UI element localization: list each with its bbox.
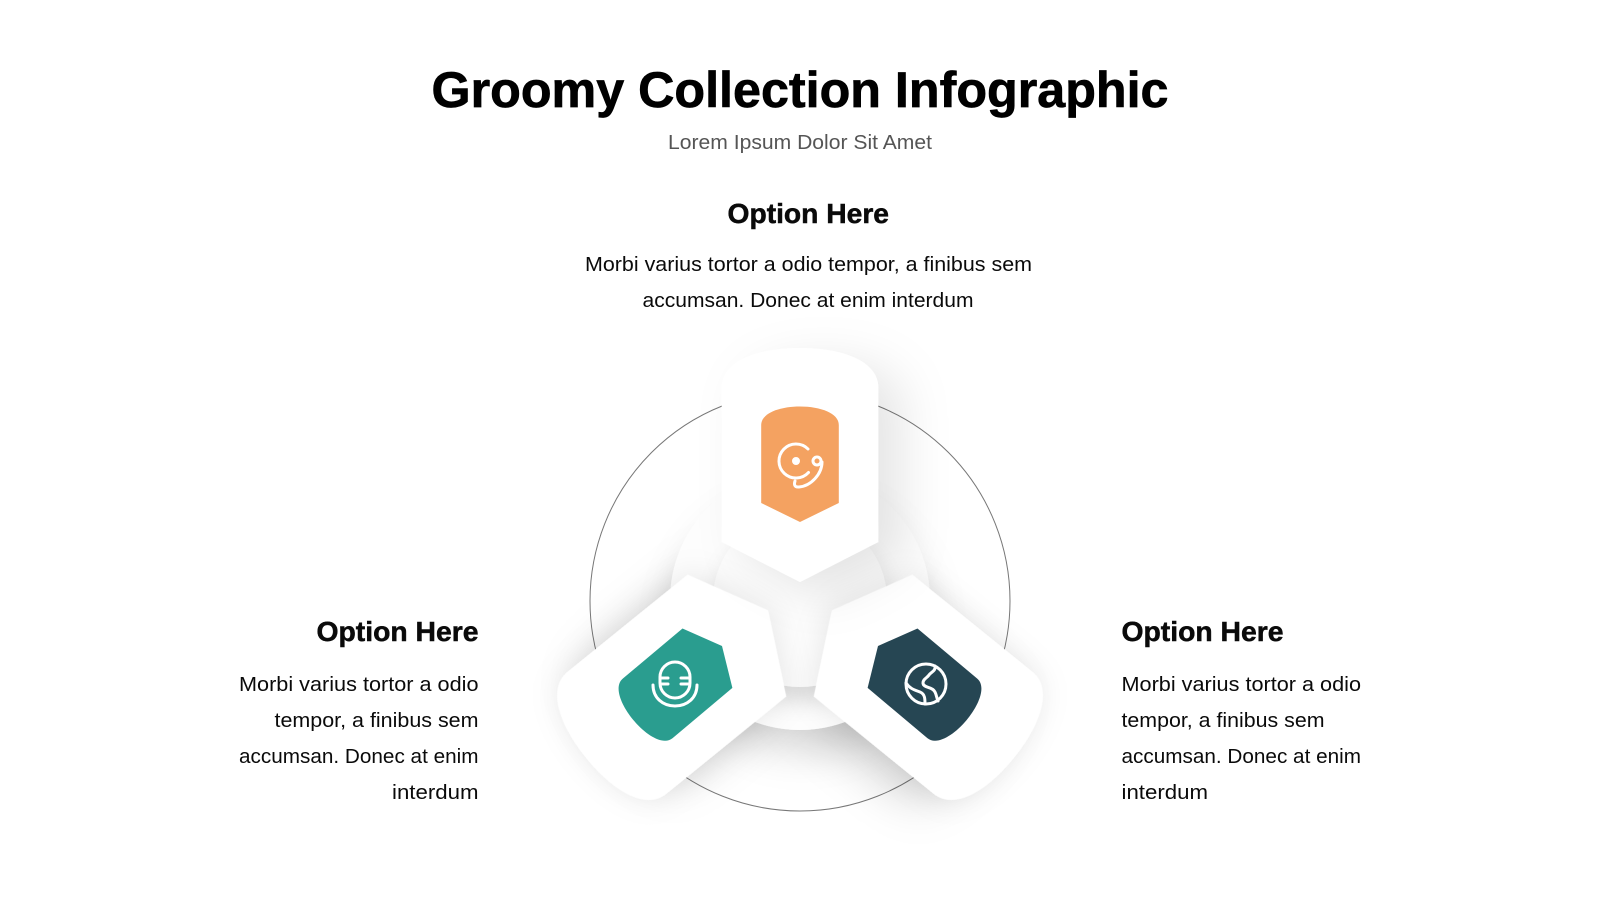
body: left option: tempor, a finibus sem xyxy=(274,709,478,732)
icon: microphone xyxy=(653,662,697,706)
text block: right option xyxy=(1122,616,1361,804)
body: right option: interdum xyxy=(1122,781,1208,804)
inner disc xyxy=(713,513,887,687)
subtitle: Lorem Ipsum Dolor Sit Amet xyxy=(668,131,932,154)
icon: turntable xyxy=(779,444,822,487)
body: left option: Morbi varius tortor a odio xyxy=(239,673,478,696)
panel: right petal xyxy=(783,550,1063,819)
shadow: right petal xyxy=(783,550,1063,819)
petal body: top xyxy=(722,348,878,582)
text block: top option xyxy=(585,198,1032,312)
body: top option: Morbi varius tortor a odio tempor, a finibus sem xyxy=(585,253,1032,276)
petal body: left xyxy=(537,550,817,819)
title: Groomy Collection Infographic xyxy=(432,62,1168,118)
petal body: right xyxy=(783,550,1063,819)
heading: left option: Option Here xyxy=(316,616,478,647)
text block: left option xyxy=(239,616,478,804)
body: left option: interdum xyxy=(392,781,478,804)
body: right option xyxy=(1122,673,1361,804)
body: left option xyxy=(239,673,478,804)
badge: navy xyxy=(853,616,991,750)
body: right option: accumsan. Donec at enim xyxy=(1122,745,1361,768)
body: top option xyxy=(585,253,1032,312)
outer ring xyxy=(590,391,1010,811)
heading: right option: Option Here xyxy=(1122,616,1284,647)
body: top option: accumsan. Donec at enim interdum xyxy=(642,289,974,312)
heading: top option: Option Here xyxy=(728,198,889,229)
body: left option: accumsan. Donec at enim xyxy=(239,745,478,768)
badge: green xyxy=(609,616,747,750)
middle disc xyxy=(670,470,930,730)
panel: top petal xyxy=(722,348,878,582)
body: right option: Morbi varius tortor a odio xyxy=(1122,673,1361,696)
body: right option: tempor, a finibus sem xyxy=(1122,709,1324,732)
badge: orange xyxy=(761,406,839,522)
panel: left petal xyxy=(537,550,817,819)
icon: globe xyxy=(906,664,946,704)
shadow: left petal xyxy=(537,550,817,819)
